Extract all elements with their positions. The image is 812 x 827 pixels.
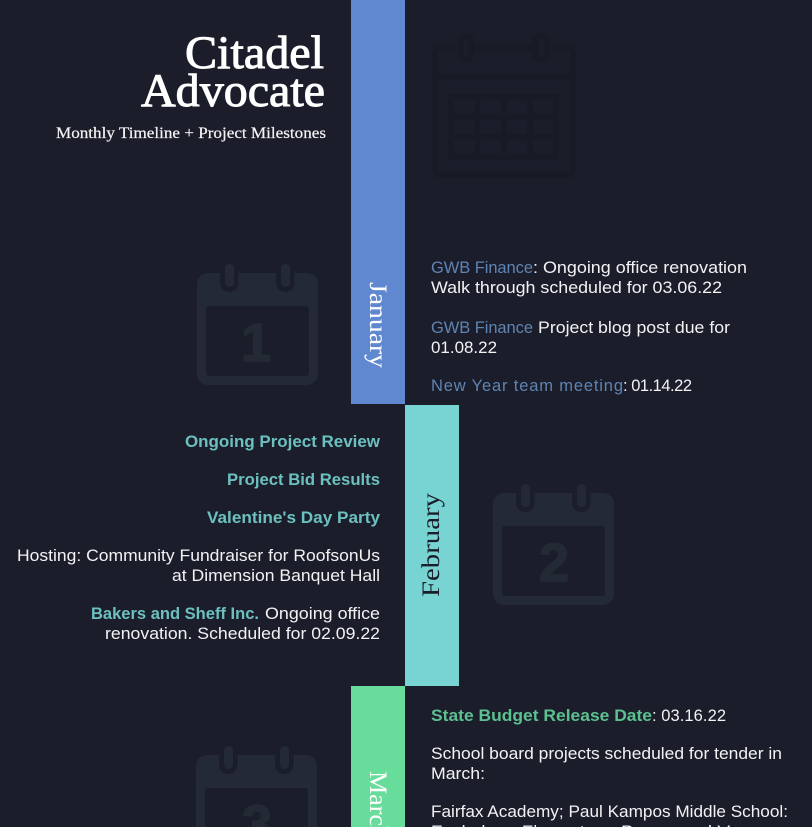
text block: february events: Bakers and Sheff Inc. bbox=[91, 605, 259, 623]
text block: january events: 01.08.22 bbox=[431, 339, 497, 357]
text block: january events: Walk through scheduled for 03.06.22 bbox=[431, 279, 722, 297]
icon: calendar 2: 2 bbox=[539, 533, 569, 593]
text block: january events: New Year team meeting bbox=[431, 377, 623, 395]
icon: calendar 3 bbox=[196, 744, 317, 827]
subtitle: Monthly Timeline + Project Milestones bbox=[56, 125, 326, 142]
text block: february events: Ongoing Project Review bbox=[185, 433, 380, 451]
text block: february events bbox=[17, 433, 381, 643]
icon: calendar 1 bbox=[197, 262, 318, 385]
panel: march bar bbox=[351, 686, 405, 827]
text block: january events: GWB Finance bbox=[431, 259, 533, 277]
february label: February bbox=[418, 492, 445, 597]
text block: march events: March: bbox=[431, 765, 485, 783]
text block: february events: Project Bid Results bbox=[227, 471, 380, 489]
text block: march events: : 03.16.22 bbox=[652, 707, 726, 725]
text block: march events: Fairfax Academy; Paul Kampos Middle School: bbox=[431, 803, 788, 821]
title: Advocate bbox=[141, 65, 325, 117]
january label: January bbox=[364, 282, 391, 369]
title bbox=[141, 27, 325, 117]
text block: february events: Ongoing office bbox=[265, 605, 380, 623]
icon: calendar 1: 1 bbox=[241, 313, 271, 373]
panel: january bar bbox=[351, 0, 405, 404]
text block: march events: School board projects scheduled for tender in bbox=[431, 745, 782, 763]
text block: january events bbox=[431, 259, 747, 395]
title: Citadel bbox=[185, 27, 324, 79]
text block: march events bbox=[431, 707, 788, 827]
text block: march events: State Budget Release Date bbox=[431, 707, 652, 725]
text block: february events: at Dimension Banquet Hall bbox=[172, 567, 380, 585]
text block: february events: Hosting: Community Fundraiser for RoofsonUs bbox=[17, 547, 380, 565]
icon: outline calendar bbox=[435, 36, 573, 174]
panel: february bar bbox=[405, 405, 459, 686]
text block: february events: Valentine's Day Party bbox=[207, 509, 381, 527]
text block: january events: : 01.14.22 bbox=[623, 377, 692, 395]
text block: february events: renovation. Scheduled for 02.09.22 bbox=[105, 625, 380, 643]
icon: calendar 2 bbox=[493, 482, 614, 605]
text block: january events: : Ongoing office renovation bbox=[533, 259, 747, 277]
text block: january events: GWB Finance bbox=[431, 319, 533, 337]
text block: january events: Project blog post due for bbox=[538, 319, 731, 337]
